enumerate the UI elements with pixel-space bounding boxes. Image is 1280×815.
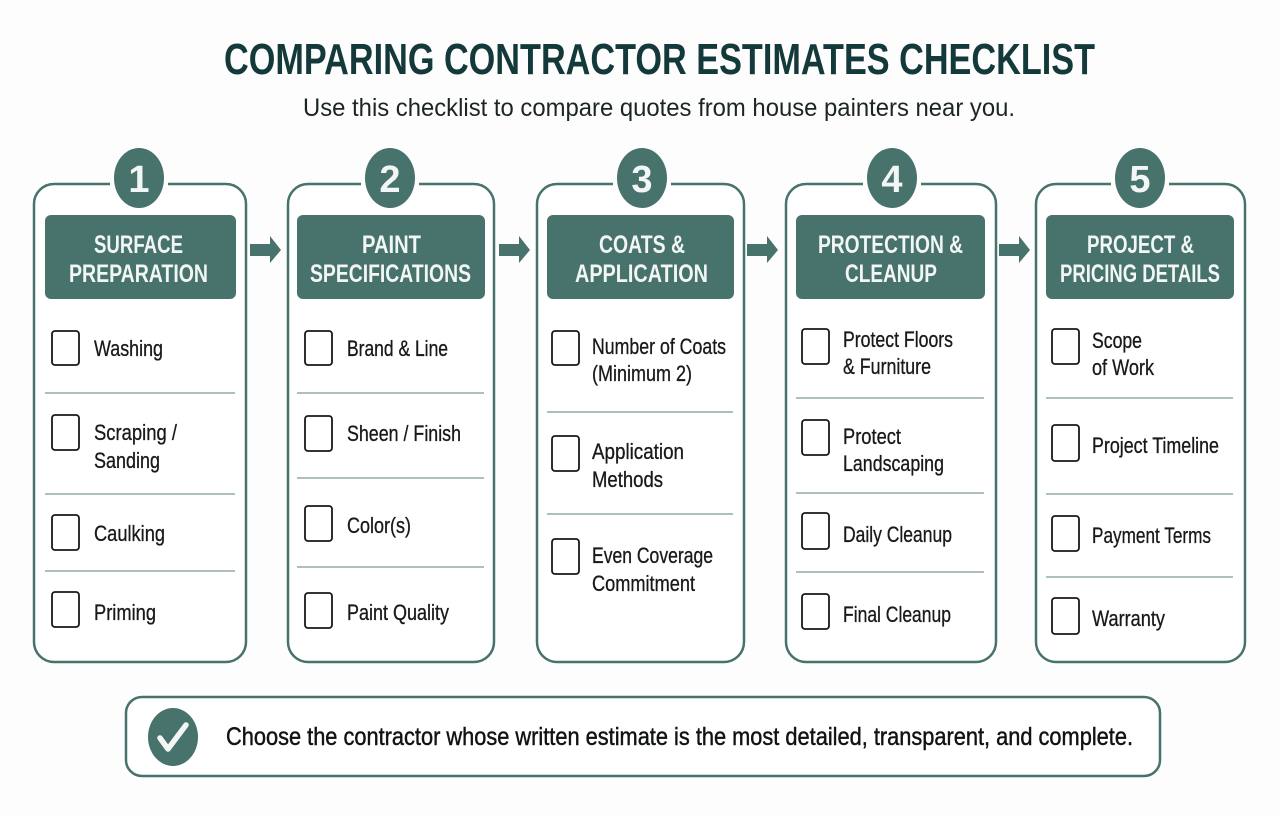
checklist item: washing: Washing <box>94 336 163 361</box>
checklist item: paint quality <box>305 593 449 628</box>
checklist item: application methods: Methods <box>592 467 663 492</box>
checklist item: number of coats <box>552 331 726 386</box>
checklist item: paint quality: Paint Quality <box>347 600 449 625</box>
heading: coats and application: APPLICATION <box>575 260 708 288</box>
checklist item: priming <box>52 592 156 627</box>
checklist item: protect landscaping <box>802 420 944 476</box>
checklist item: washing <box>52 331 163 365</box>
checklist item: application methods: Application <box>592 439 684 464</box>
heading: surface preparation: PREPARATION <box>69 260 208 288</box>
checklist item: daily cleanup: Daily Cleanup <box>843 522 952 547</box>
heading: coats and application <box>547 215 734 299</box>
checklist item: warranty <box>1052 598 1165 634</box>
badge: step 1: 1 <box>128 159 150 201</box>
checklist item: colors: Color(s) <box>347 513 411 538</box>
arrow: step 4 to 5 <box>999 236 1030 263</box>
checklist item: daily cleanup <box>802 513 952 549</box>
checklist item: number of coats: (Minimum 2) <box>592 361 692 386</box>
badge: step 3: 3 <box>631 159 653 201</box>
checklist item: protect landscaping: Protect <box>843 424 901 449</box>
badge: step 3 <box>617 148 667 208</box>
checklist item: brand and line <box>305 331 448 365</box>
checklist item: application methods <box>552 436 684 492</box>
badge: step 4: 4 <box>881 159 903 201</box>
checklist item: scope of work: Scope <box>1092 328 1142 353</box>
callout text: Choose the contractor whose written estimate is the most detailed, transparent, and complete. <box>226 723 1133 751</box>
badge: step 1 <box>114 148 164 208</box>
checklist item: caulking: Caulking <box>94 521 165 546</box>
heading: project and pricing details: PRICING DETAILS <box>1060 260 1220 288</box>
checklist item: protect landscaping: Landscaping <box>843 451 944 476</box>
badge: step 4 <box>867 148 917 208</box>
heading: protection and cleanup <box>796 215 985 299</box>
arrow: step 2 to 3 <box>499 236 530 263</box>
panel: project and pricing details <box>1036 148 1245 662</box>
panel: paint specifications <box>288 148 494 662</box>
checklist item: final cleanup <box>802 594 951 629</box>
checklist item: scope of work: of Work <box>1092 355 1155 380</box>
heading: project and pricing details: PROJECT & <box>1087 231 1194 259</box>
callout: final recommendation <box>126 697 1160 776</box>
checklist item: priming: Priming <box>94 600 156 625</box>
subtitle: Use this checklist to compare quotes from house painters near you. <box>303 94 1015 122</box>
arrow: step 1 to 2 <box>250 236 281 263</box>
checklist item: payment terms <box>1052 516 1211 551</box>
badge: step 2: 2 <box>379 159 401 201</box>
heading: paint specifications <box>297 215 485 299</box>
checklist item: warranty: Warranty <box>1092 606 1165 631</box>
icon: check mark <box>148 708 198 766</box>
checklist item: number of coats: Number of Coats <box>592 334 726 359</box>
checklist item: project timeline <box>1052 425 1219 461</box>
arrow: step 3 to 4 <box>747 236 778 263</box>
heading: coats and application: COATS & <box>599 231 685 259</box>
badge: step 2 <box>365 148 415 208</box>
checklist item: sheen / finish <box>305 416 461 451</box>
badge: step 5: 5 <box>1129 159 1151 201</box>
checklist item: final cleanup: Final Cleanup <box>843 602 951 627</box>
heading: paint specifications: SPECIFICATIONS <box>310 260 471 288</box>
badge: step 5 <box>1115 148 1165 208</box>
checklist item: even coverage commitment: Even Coverage <box>592 543 713 568</box>
panel: surface preparation <box>34 148 246 662</box>
checklist item: even coverage commitment <box>552 539 713 596</box>
heading: paint specifications: PAINT <box>362 231 421 259</box>
checklist item: scraping / sanding: Sanding <box>94 448 160 473</box>
checklist item: scraping / sanding: Scraping / <box>94 420 178 445</box>
checklist item: protect floors and furniture <box>802 327 953 379</box>
panel: protection and cleanup <box>786 148 996 662</box>
checklist item: project timeline: Project Timeline <box>1092 433 1219 458</box>
heading: surface preparation: SURFACE <box>94 231 183 259</box>
checklist item: protect floors and furniture: & Furniture <box>843 354 931 379</box>
checklist item: protect floors and furniture: Protect Floors <box>843 327 953 352</box>
heading: protection and cleanup: CLEANUP <box>845 260 937 288</box>
heading: project and pricing details <box>1046 215 1234 299</box>
checklist item: brand and line: Brand & Line <box>347 336 448 361</box>
checklist item: scope of work <box>1052 328 1155 380</box>
checklist item: even coverage commitment: Commitment <box>592 571 695 596</box>
checklist item: caulking <box>52 515 165 550</box>
checklist item: scraping / sanding <box>52 415 178 473</box>
checklist item: sheen / finish: Sheen / Finish <box>347 421 461 446</box>
checklist item: payment terms: Payment Terms <box>1092 523 1211 548</box>
checklist item: colors <box>305 506 411 541</box>
heading: protection and cleanup: PROTECTION & <box>818 231 963 259</box>
heading: surface preparation <box>45 215 236 299</box>
panel: coats and application <box>537 148 744 662</box>
